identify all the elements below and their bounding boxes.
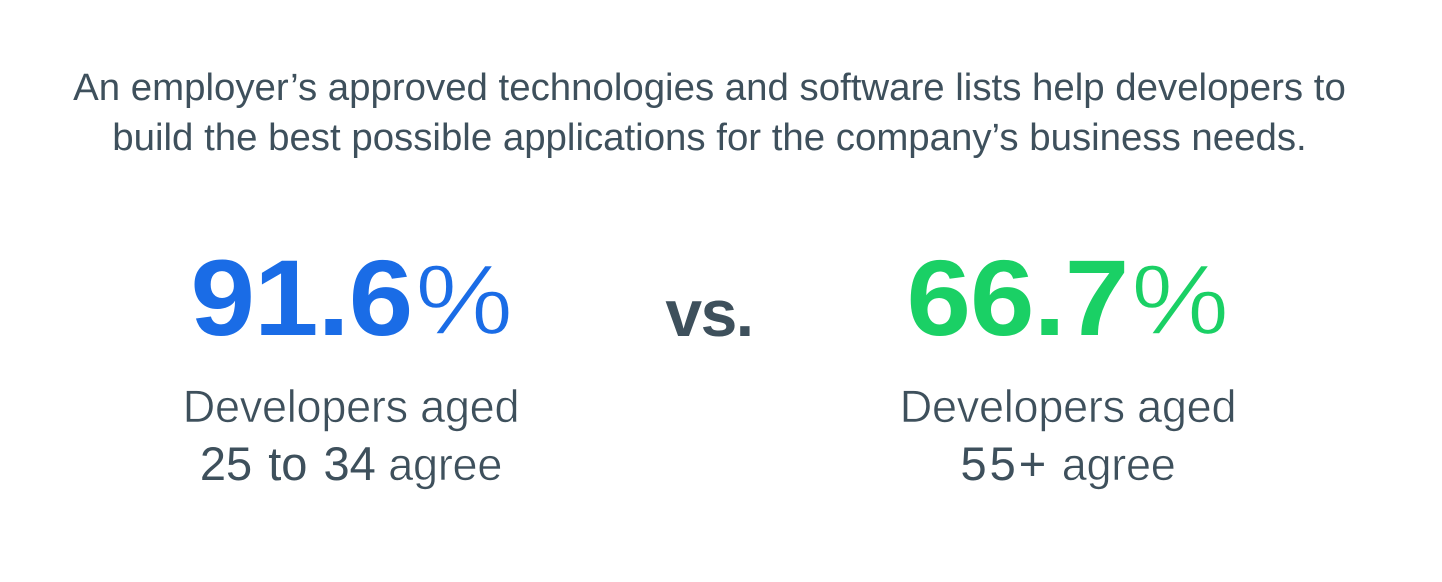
- label: developers aged 25 to 34: Developers aged: [183, 381, 519, 432]
- label: developers aged 55+: 55+ agree: [960, 437, 1176, 490]
- stat: 91.6%: 91.6: [190, 237, 412, 358]
- vs label: vs.: [665, 276, 753, 350]
- label: developers aged 25 to 34: [183, 381, 519, 490]
- intro text: build the best possible applications for the company’s business needs.: [112, 116, 1307, 159]
- stat: 91.6%: [190, 237, 513, 358]
- label: developers aged 55+: [900, 381, 1236, 490]
- label: developers aged 55+: Developers aged: [900, 381, 1236, 432]
- stat: 66.7%: %: [1131, 245, 1229, 356]
- label: developers aged 25 to 34: 25 to 34 agree: [200, 437, 502, 490]
- intro text: An employer’s approved technologies and software lists help developers to: [73, 66, 1346, 109]
- stat: 66.7%: [906, 237, 1229, 358]
- intro text: [73, 66, 1346, 159]
- stat: 66.7%: 66.7: [906, 237, 1128, 358]
- stat: 91.6%: %: [415, 245, 513, 356]
